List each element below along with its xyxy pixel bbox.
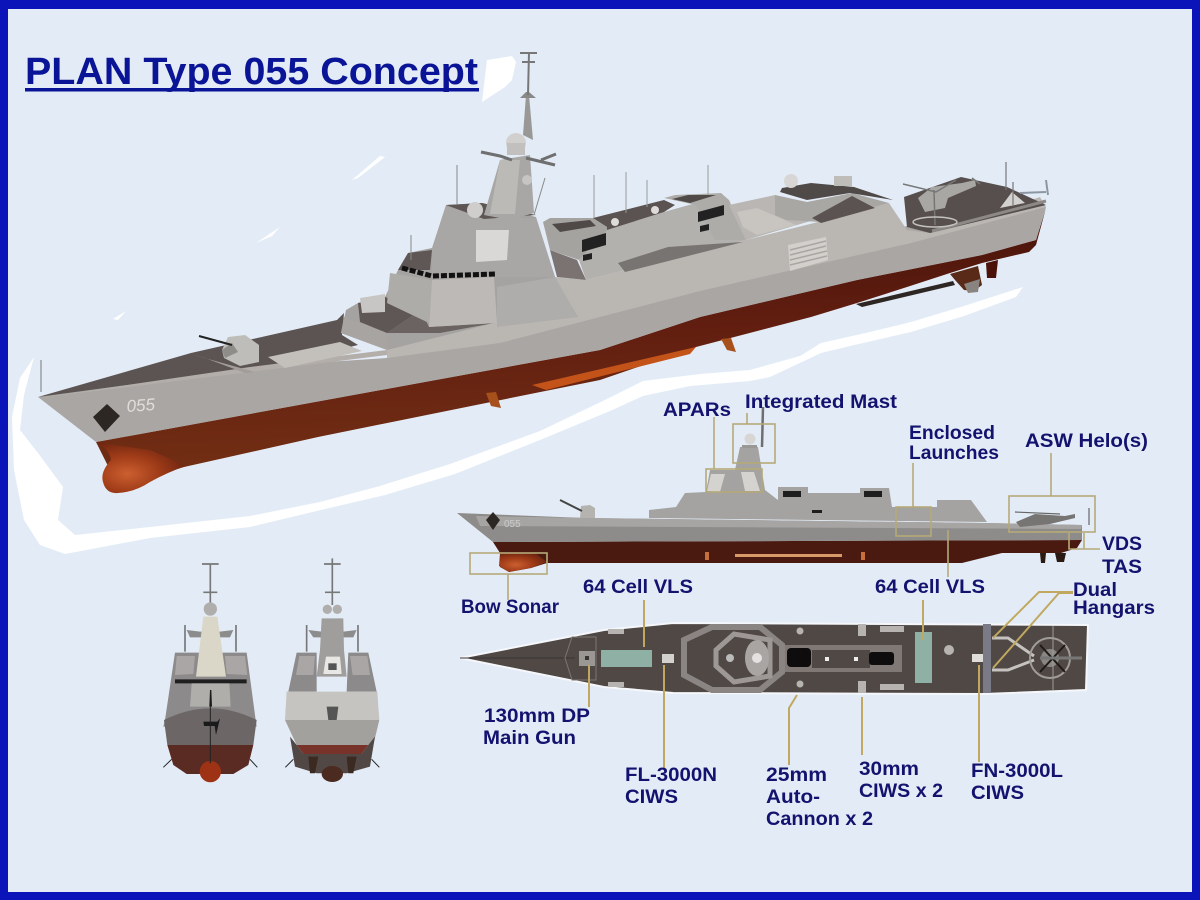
- plan view main gun: [565, 637, 596, 680]
- main ship window groups: [582, 205, 724, 261]
- plan view deck outline: [460, 623, 1088, 694]
- main ship helipad deck: [904, 177, 1046, 233]
- labels: 25mm: [766, 765, 827, 786]
- main ship pyramid mast block: [432, 207, 555, 278]
- side view bow marking and number: 055: [504, 519, 521, 530]
- bow view ship: [163, 563, 257, 782]
- side view bow marking and number: [486, 512, 521, 530]
- side view red hull: [493, 540, 1082, 572]
- side view grey hull: [457, 513, 1082, 542]
- main ship red lower hull: [96, 208, 1046, 480]
- main ship upper hull band: [387, 197, 1046, 358]
- main ship funnel block two: [664, 193, 746, 240]
- main ship lower front wall: [341, 317, 387, 350]
- labels: Auto-: [766, 787, 820, 808]
- side view rudder and propeller: [1040, 553, 1066, 563]
- main ship fins and rudder: [486, 260, 998, 408]
- main ship VLS hatches: [268, 342, 362, 368]
- labels: CIWS: [625, 787, 678, 808]
- main ship bow marking and hull number: 055: [126, 395, 156, 416]
- main ship gun director: [360, 294, 385, 313]
- main ship grey hull side: [38, 207, 1046, 442]
- labels: Bow Sonar: [461, 597, 560, 618]
- labels: Main Gun: [483, 728, 576, 749]
- side view mast and sphere: [707, 407, 763, 492]
- main ship forward superstructure: [341, 203, 578, 350]
- side view main gun: [560, 500, 595, 518]
- main ship bridge windows: [402, 268, 495, 276]
- plan view aft VLS: [915, 632, 932, 683]
- main ship deck edge highlight: [38, 350, 387, 398]
- stern view ship: [285, 558, 379, 782]
- labels: 130mm DP: [484, 706, 590, 727]
- main ship side wall: [579, 200, 746, 280]
- labels: Launches: [909, 443, 999, 464]
- main ship fore deck: [38, 313, 358, 397]
- labels: Cannon x 2: [766, 809, 873, 830]
- main ship helicopter: [903, 178, 980, 227]
- white wake brush strokes: [12, 56, 1023, 554]
- plan view forward VLS: [601, 650, 652, 667]
- labels: Dual: [1073, 580, 1117, 601]
- main ship UAV and stern mast: [1000, 162, 1048, 208]
- labels: Integrated Mast: [745, 392, 898, 413]
- title: PLAN Type 055 Concept: [25, 51, 478, 93]
- labels: [461, 392, 1155, 830]
- side view bulb: [499, 553, 547, 572]
- main ship bow marking and hull number: [41, 360, 156, 432]
- main ship: perspective view: [38, 52, 1048, 493]
- labels: CIWS: [971, 783, 1024, 804]
- main ship aft superstructure: [543, 165, 746, 280]
- main ship tower and mast: [411, 52, 556, 260]
- main ship bow bulb: [96, 442, 186, 493]
- labels: CIWS x 2: [859, 781, 943, 802]
- labels: 64 Cell VLS: [875, 577, 985, 598]
- plan view ship: [460, 623, 1088, 694]
- main ship bridge walls: [387, 273, 432, 323]
- plan view flight deck: [992, 626, 1082, 690]
- annotation boxes and leader lines on side view: [470, 413, 1100, 600]
- side view orange strip: [735, 554, 842, 557]
- side view ship: [457, 407, 1089, 572]
- labels: Enclosed: [909, 423, 995, 444]
- plan view corridor and vents: [785, 645, 902, 672]
- main ship APAR panel: [476, 230, 509, 262]
- main ship main gun: [199, 335, 259, 366]
- labels: FL-3000N: [625, 765, 717, 786]
- side view windows: [783, 491, 882, 513]
- side view superstructure: [649, 447, 987, 522]
- main ship recess: [550, 250, 586, 280]
- main ship funnel block one: [543, 218, 607, 260]
- main ship aft VLS and hangar: [729, 174, 893, 271]
- plan view hangar strip: [983, 624, 991, 693]
- plan view leader lines: [589, 592, 1073, 768]
- labels: Hangars: [1073, 598, 1155, 619]
- labels: 30mm: [859, 759, 919, 780]
- main ship orange strip: [532, 347, 696, 390]
- labels: TAS: [1102, 557, 1142, 578]
- labels: 64 Cell VLS: [583, 577, 693, 598]
- plan view CIWS and boats: [608, 624, 983, 693]
- labels: VDS: [1102, 534, 1142, 555]
- side view helicopter: [1015, 508, 1089, 527]
- plan view forward superstructure: [662, 627, 782, 690]
- labels: FN-3000L: [971, 761, 1063, 782]
- labels: APARs: [663, 400, 731, 421]
- labels: ASW Helo(s): [1025, 431, 1148, 452]
